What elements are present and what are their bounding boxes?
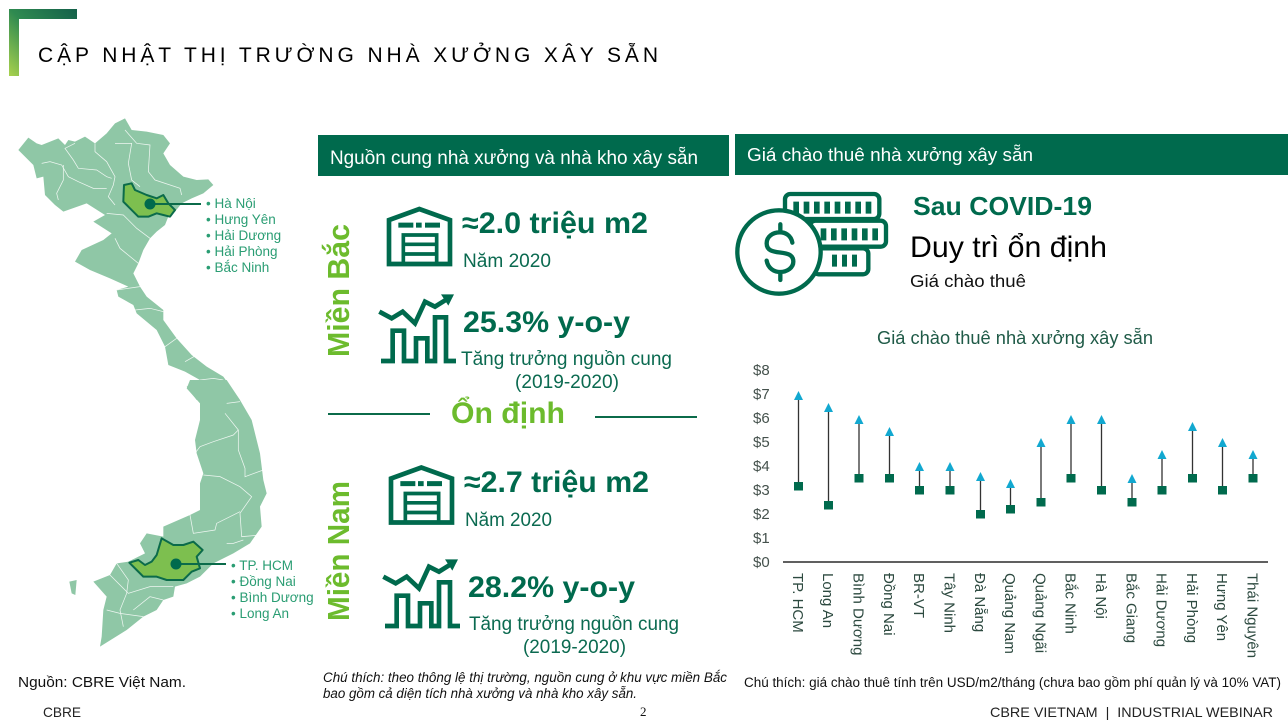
panel: supply xyxy=(318,135,729,701)
rent footnote: Chú thích: giá chào thuê tính trên USD/m2/tháng (chưa bao gồm phí quản lý và 10% VAT) xyxy=(744,675,1281,690)
chart title: Giá chào thuê nhà xưởng xây sẵn xyxy=(877,328,1153,348)
icon: growth chart south xyxy=(383,559,460,626)
icon: warehouse south xyxy=(391,467,452,523)
list: southern provinces: • TP. HCM xyxy=(231,558,293,573)
y axis labels: $5 xyxy=(753,434,770,451)
icon: coins xyxy=(737,194,886,294)
category labels: Bắc Giang xyxy=(1122,573,1140,643)
label: north growth: (2019-2020) xyxy=(515,372,619,393)
y axis labels: $0 xyxy=(753,554,770,571)
category labels: Long An xyxy=(819,573,836,628)
list: southern provinces: • Long An xyxy=(231,606,289,621)
label: north growth: Tăng trưởng nguồn cung xyxy=(461,349,672,370)
list: northern provinces: • Hải Dương xyxy=(206,228,281,243)
corner bracket xyxy=(9,9,77,76)
category labels: Quảng Ngãi xyxy=(1032,573,1048,653)
divider: stable: Ổn định xyxy=(451,396,565,430)
list: northern provinces: • Hà Nội xyxy=(206,196,256,211)
label: south growth xyxy=(469,614,679,658)
category labels: Hà Nội xyxy=(1092,573,1109,619)
label: north growth xyxy=(461,349,672,393)
title: CẬP NHẬT THỊ TRƯỜNG NHÀ XƯỞNG XÂY SẴN xyxy=(38,43,658,67)
y axis labels: $2 xyxy=(753,506,770,523)
rent header: Giá chào thuê nhà xưởng xây sẵn xyxy=(747,144,1033,165)
stat: north supply: ≈2.0 triệu m2 xyxy=(462,207,648,240)
list: southern provinces: • Đồng Nai xyxy=(231,574,296,589)
category labels: Đà Nẵng xyxy=(971,573,988,632)
supply header xyxy=(318,135,729,176)
category labels: Hưng Yên xyxy=(1213,573,1230,641)
heading: stable: Duy trì ổn định xyxy=(910,231,1107,264)
map: southern vietnam xyxy=(69,380,267,647)
y axis labels xyxy=(753,362,770,571)
map: northern vietnam xyxy=(18,118,240,400)
range stems xyxy=(798,396,1253,514)
heading: after covid: Sau COVID-19 xyxy=(913,191,1092,221)
y axis labels: $8 xyxy=(753,362,770,379)
y axis labels: $3 xyxy=(753,482,770,499)
list: southern provinces: • Bình Dương xyxy=(231,590,314,605)
footer: event: CBRE VIETNAM | INDUSTRIAL WEBINAR xyxy=(990,704,1273,720)
category labels: TP. HCM xyxy=(789,573,806,633)
category labels: Bắc Ninh xyxy=(1062,573,1078,634)
label: south year: Năm 2020 xyxy=(465,510,552,531)
supply footnote: bao gồm cả diện tích nhà xưởng và nhà kho xây sẵn. xyxy=(323,686,637,701)
chart: rent ranges xyxy=(753,362,1268,658)
category labels: Bình Dương xyxy=(850,573,866,655)
y axis labels: $6 xyxy=(753,410,770,427)
category labels: Đồng Nai xyxy=(880,573,897,636)
category labels: Tây Ninh xyxy=(940,573,958,633)
icon: warehouse north xyxy=(389,209,450,265)
low markers xyxy=(794,474,1258,518)
label: asking rent: Giá chào thuê xyxy=(910,271,1026,291)
label: north year: Năm 2020 xyxy=(463,251,551,272)
stat: south growth: 28.2% y-o-y xyxy=(468,571,635,604)
category labels: Hải Phòng xyxy=(1183,573,1200,643)
region label: south: Miền Nam xyxy=(322,481,356,621)
category labels: Hải Dương xyxy=(1152,573,1170,647)
supply footnote: Chú thích: theo thông lệ thị trường, nguồn cung ở khu vực miền Bắc xyxy=(323,670,727,685)
panel: vietnam map xyxy=(18,118,314,647)
rent header xyxy=(735,134,1288,175)
category labels: BR-VT xyxy=(910,573,927,618)
high markers xyxy=(794,391,1258,488)
label: south growth: (2019-2020) xyxy=(523,637,626,658)
stat: north growth: 25.3% y-o-y xyxy=(463,306,630,339)
marker: northern hub xyxy=(144,198,201,210)
supply footnote xyxy=(323,670,727,701)
footer: brand: CBRE xyxy=(43,704,81,720)
y axis labels: $4 xyxy=(753,458,770,475)
category labels: Quảng Nam xyxy=(1001,573,1018,654)
y axis labels: $7 xyxy=(753,386,770,403)
supply header: Nguồn cung nhà xưởng và nhà kho xây sẵn xyxy=(330,146,698,169)
category labels: Thái Nguyên xyxy=(1244,573,1260,658)
footer: page number: 2 xyxy=(640,704,646,719)
panel: rent xyxy=(735,134,1288,690)
list: northern provinces xyxy=(206,196,281,275)
marker: southern hub xyxy=(170,558,226,570)
list: northern provinces: • Hưng Yên xyxy=(206,212,276,227)
region label: north: Miền Bắc xyxy=(320,224,356,357)
list: southern provinces xyxy=(231,558,314,621)
stat: south supply: ≈2.7 triệu m2 xyxy=(464,466,649,499)
list: northern provinces: • Hải Phòng xyxy=(206,244,278,259)
source note: Nguồn: CBRE Việt Nam. xyxy=(18,674,186,691)
label: south growth: Tăng trưởng nguồn cung xyxy=(469,614,679,635)
category labels xyxy=(789,573,1260,658)
list: northern provinces: • Bắc Ninh xyxy=(206,260,269,275)
y axis labels: $1 xyxy=(753,530,770,547)
icon: growth chart north xyxy=(379,294,456,361)
